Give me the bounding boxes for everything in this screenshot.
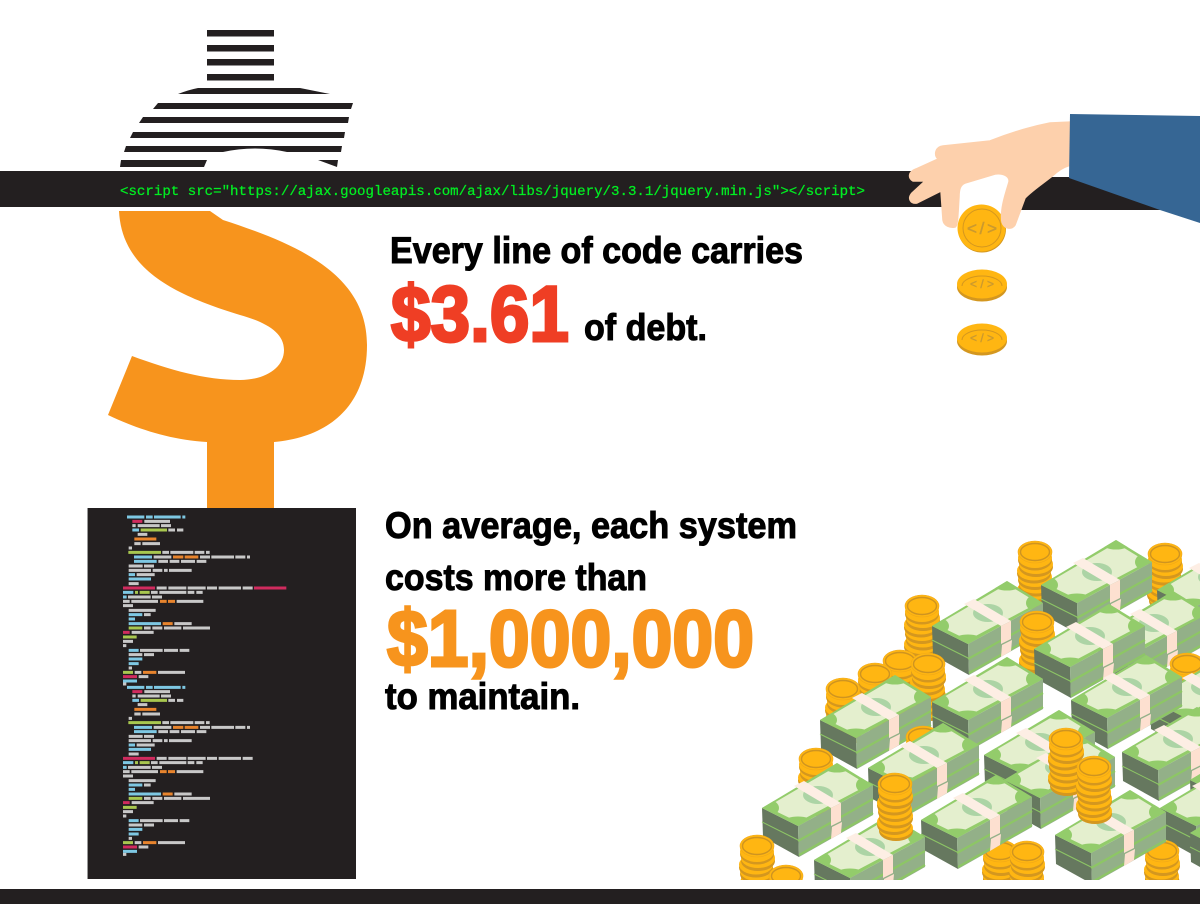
icon: falling code coins: </> (970, 277, 994, 291)
icon: hand (910, 122, 1072, 228)
stat: debt per line: $3.61 (391, 269, 569, 358)
code bar: right section (1016, 177, 1170, 210)
code bar: left section (0, 171, 942, 207)
illustration: pile of cash and coins (739, 538, 1200, 904)
icon: falling code coins: </> (967, 219, 997, 238)
text: costs more than: costs more than (385, 557, 647, 598)
heading: on average: On average, each system (385, 505, 797, 546)
footer bar (0, 889, 1200, 904)
icon: falling code coins: </> (970, 331, 994, 345)
script line of code: <script src="https://ajax.googleapis.com/ajax/libs/jquery/3.3.1/jquery.min.js"></script> (120, 184, 865, 200)
stat: maintenance cost: $1,000,000 (387, 594, 754, 683)
heading: every line of code: Every line of code carries (390, 230, 803, 271)
text: to maintain: to maintain. (385, 676, 580, 717)
text: of debt: of debt. (584, 307, 707, 348)
dollar sign: orange bottom (108, 211, 367, 508)
icon: blue sleeve (1069, 114, 1200, 223)
dollar sign: striped top (120, 30, 353, 167)
icon: falling code coins (957, 204, 1007, 356)
panel: code listing (87, 508, 356, 879)
